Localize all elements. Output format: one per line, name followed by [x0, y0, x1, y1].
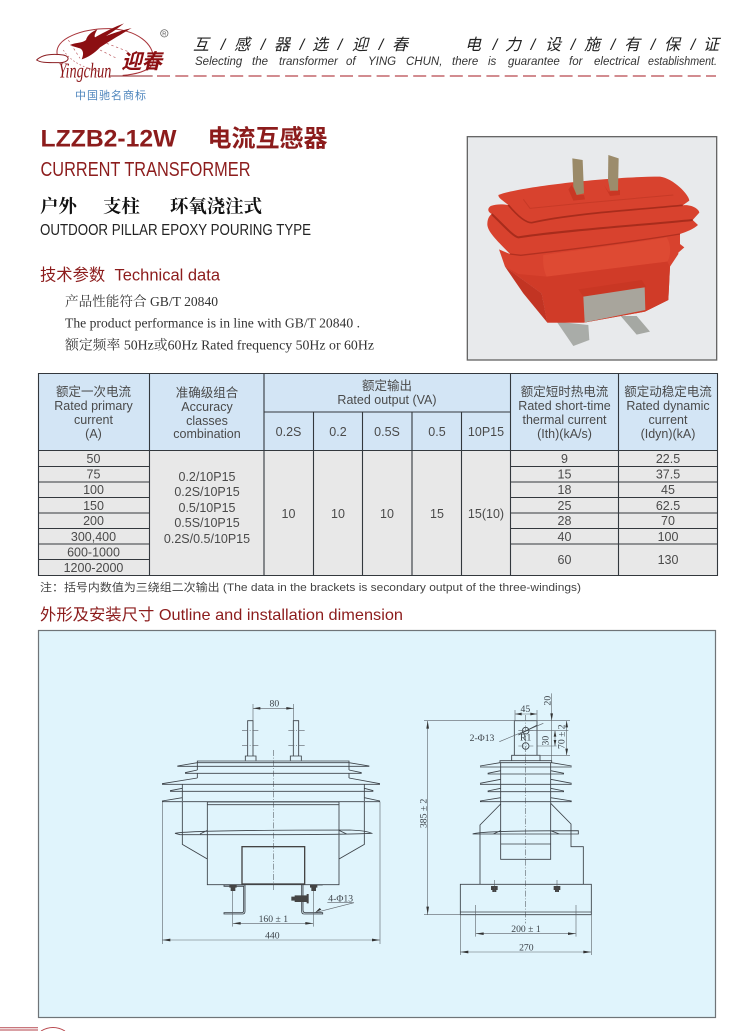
column header: rated output: 额定输出 — [362, 378, 412, 393]
upper body shading — [543, 237, 670, 277]
dynamic current values: 70 — [661, 514, 675, 528]
slogan: English: guarantee — [508, 56, 560, 68]
housing — [473, 803, 583, 884]
drawing: side elevation: R1 — [520, 733, 531, 744]
primary current values: 600-1000 — [67, 546, 120, 560]
thermal current values: 28 — [558, 514, 571, 528]
drawing: front elevation — [162, 699, 380, 944]
footer mark — [0, 1027, 65, 1031]
slogan: English: for — [569, 56, 584, 68]
type heading English: OUTDOOR PILLAR EPOXY POURING TYPE — [40, 222, 311, 239]
column header: primary current: (A) — [85, 427, 102, 441]
housing — [175, 802, 372, 885]
dynamic current values: 100 — [658, 530, 678, 544]
slogan: Chinese: 互/感/器/选/迎/春 — [193, 36, 410, 54]
technical data table — [38, 374, 718, 576]
logo: Yingchun swallow — [37, 23, 168, 82]
dynamic current values — [656, 452, 680, 567]
column header: accuracy: classes — [186, 414, 228, 428]
rated output values — [282, 507, 504, 521]
column header: rated output: 0.2 — [329, 425, 347, 439]
drawing: side elevation: 20 — [542, 696, 553, 705]
dimension labels: 80 — [270, 699, 279, 710]
terminals — [568, 185, 585, 201]
slogan: English: YING — [368, 56, 396, 68]
drawing: side elevation: 200 ± 1 — [511, 924, 541, 935]
thermal current values: 25 — [558, 499, 571, 513]
dynamic current values: 130 — [658, 553, 678, 567]
primary current values — [64, 452, 123, 575]
column header: rated output: 0.5 — [428, 425, 446, 439]
accuracy values: 0.5S/10P15 — [174, 516, 240, 530]
column header: rated output: 0.5S — [374, 425, 400, 439]
subtitle: current transformer: CURRENT TRANSFORMER — [40, 159, 250, 181]
drawing: side elevation: 30 — [540, 736, 551, 745]
drawing: front elevation: 4-Φ13 — [328, 893, 353, 904]
primary current values: 50 — [87, 452, 100, 466]
drawing: side elevation — [419, 693, 591, 955]
technical data paragraph — [65, 293, 374, 352]
rated output values: 15 — [430, 507, 444, 521]
column header: primary current: current — [74, 413, 113, 427]
technical data paragraph: 额定频率 50Hz或60Hz Rated frequency 50Hz or 60Hz — [65, 336, 374, 352]
thermal current values: 40 — [558, 530, 571, 544]
slogan: English: CHUN, — [406, 56, 442, 68]
dynamic current values: 62.5 — [656, 499, 680, 513]
column header: thermal current: Rated short-time — [518, 399, 611, 413]
table footnote: 注：括号内数值为三绕组二次输出 (The data in the brackets is secondary output of the three-windings) — [40, 580, 581, 594]
type heading Chinese: 环氧浇注式 — [170, 196, 262, 216]
lid layer edges — [508, 205, 683, 223]
rated output values: 10 — [282, 507, 295, 521]
primary current values: 75 — [87, 468, 100, 482]
dimension lines — [162, 704, 380, 944]
logo: Yingchun swallow: 迎春 — [121, 51, 164, 74]
column header: dynamic current: (Idyn)(kA) — [641, 427, 695, 441]
sheds — [162, 761, 380, 802]
drawing: side elevation: 385 ± 2 — [419, 798, 430, 828]
column header: thermal current: thermal current — [522, 413, 607, 427]
rated output values: 10 — [380, 507, 394, 521]
column header: thermal current: (Ith)(kA/s) — [537, 427, 592, 441]
slogan: English: Selecting — [195, 56, 243, 68]
thermal current values: 18 — [558, 483, 571, 497]
slogan: English: electrical — [594, 56, 640, 68]
slogan: English: is — [488, 56, 497, 68]
accuracy values: 0.2S/10P15 — [174, 485, 240, 499]
slogan: Chinese — [193, 36, 722, 54]
type heading Chinese: 支柱 — [103, 196, 140, 216]
column header: primary current — [54, 384, 133, 441]
nameplate — [578, 280, 646, 297]
technical data paragraph: The product performance is in line with GB/T 20840 . — [65, 316, 360, 331]
slogan: Chinese: 电/力/设/施/有/保/证 — [465, 36, 722, 54]
thermal current values: 15 — [558, 468, 571, 482]
red silhouette — [487, 177, 699, 323]
slogan: English: establishment. — [648, 56, 717, 68]
column header: accuracy: Accuracy — [181, 400, 233, 414]
column header: rated output: Rated output (VA) — [337, 393, 437, 407]
drawing: side elevation: 2-Φ13 — [470, 733, 495, 744]
thermal current values — [558, 452, 571, 567]
slogan: English: the — [252, 56, 268, 68]
column header: dynamic current — [624, 384, 712, 441]
slogan: English: there — [452, 56, 478, 68]
column header: dynamic current: current — [649, 413, 688, 427]
technical data paragraph: 产品性能符合 GB/T 20840 — [65, 293, 218, 309]
primary current values: 300,400 — [71, 530, 116, 544]
primary current values: 150 — [83, 499, 104, 513]
dynamic current values: 45 — [661, 483, 675, 497]
mounting brackets — [224, 885, 323, 914]
column header: primary current: Rated primary — [54, 399, 133, 413]
column header: dynamic current: Rated dynamic — [626, 399, 710, 413]
column header: accuracy — [173, 385, 241, 441]
slogan: English: of — [346, 56, 357, 68]
title: 电流互感器 — [208, 125, 328, 153]
primary current values: 200 — [83, 514, 104, 528]
column header: dynamic current: 额定动稳定电流 — [624, 384, 712, 399]
column header: accuracy: 准确级组合 — [176, 385, 239, 400]
slogan: English: transformer — [279, 56, 339, 68]
mounting feet — [557, 322, 589, 346]
rated output values: 15(10) — [468, 507, 504, 521]
product photo — [467, 137, 717, 360]
dynamic current values: 22.5 — [656, 452, 680, 466]
drawing: side elevation: 70 ± 2 — [557, 724, 568, 749]
accuracy values: 0.2/10P15 — [178, 470, 236, 484]
accuracy values: 0.5/10P15 — [178, 501, 236, 515]
terminal — [512, 721, 540, 761]
base — [460, 884, 591, 915]
thermal current values: 60 — [558, 553, 571, 567]
table body band — [38, 450, 718, 576]
brand caption: 中国驰名商标 — [75, 88, 147, 102]
column header: rated output — [276, 378, 504, 439]
table grid — [38, 374, 718, 576]
column header: primary current: 额定一次电流 — [56, 384, 131, 399]
accuracy values: 0.2S/0.5/10P15 — [164, 532, 250, 546]
header dashed rule — [157, 75, 716, 77]
column header: rated output: 10P15 — [468, 425, 504, 439]
dimension panel — [38, 630, 716, 1018]
title: LZZB2-12W — [40, 126, 177, 153]
logo: Yingchun swallow: Yingchun — [59, 60, 111, 82]
primary current values: 100 — [83, 483, 104, 497]
sheds — [480, 761, 572, 859]
rated output values: 10 — [331, 507, 345, 521]
drawing: front elevation: 160 ± 1 — [259, 914, 288, 925]
accuracy values — [164, 470, 250, 546]
column header: thermal current — [518, 384, 611, 441]
column header: thermal current: 额定短时热电流 — [521, 384, 609, 399]
drawing: side elevation: 270 — [519, 943, 534, 954]
terminals — [245, 721, 301, 761]
dimension lines — [424, 693, 591, 955]
primary current values: 1200-2000 — [64, 561, 123, 575]
dynamic current values: 37.5 — [656, 468, 680, 482]
column header: rated output: 0.2S — [276, 425, 301, 439]
type heading Chinese: 户外 — [40, 196, 78, 216]
thermal current values: 9 — [561, 452, 568, 466]
drawing: front elevation: 440 — [265, 931, 280, 942]
section heading: outline dimension: 外形及安装尺寸 Outline and installation dimension — [40, 606, 403, 624]
table header band — [38, 374, 718, 450]
section heading: technical data: Technical data — [114, 266, 221, 284]
dimension labels: 45 — [521, 704, 530, 715]
logo: Yingchun swallow: R — [162, 32, 166, 38]
column header: accuracy: combination — [173, 427, 241, 441]
section heading: technical data: 技术参数 — [40, 266, 105, 284]
